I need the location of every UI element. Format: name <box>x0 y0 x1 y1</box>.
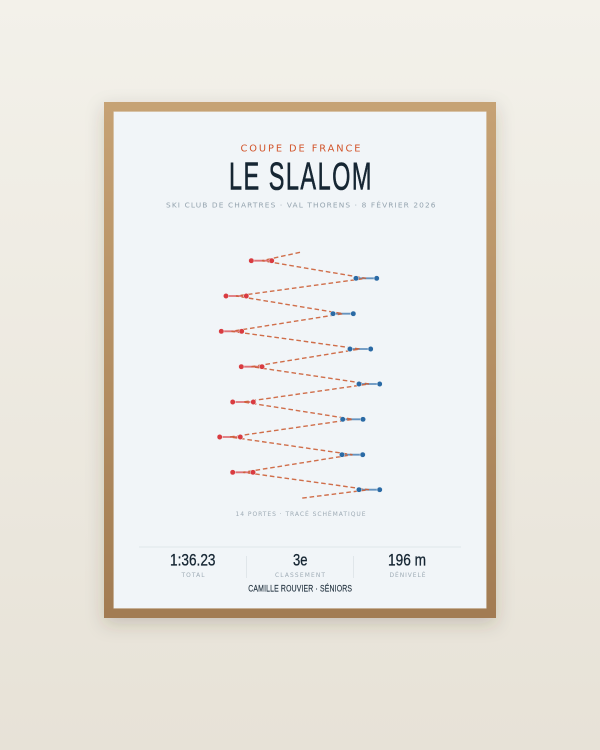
stat: total time: 1:36.23 <box>170 550 216 570</box>
blue gate dots <box>330 276 382 492</box>
stat: total time: TOTAL <box>180 573 205 579</box>
stats rule <box>139 546 461 548</box>
stat: ranking <box>275 550 325 579</box>
stat: elevation <box>388 550 426 579</box>
title: LE SLALOM <box>229 154 372 198</box>
wooden frame <box>104 102 496 618</box>
slalom course chart <box>217 252 382 498</box>
stat: elevation: DÉNIVELÉ <box>390 571 426 579</box>
eyebrow: event name: COUPE DE FRANCE <box>240 143 360 154</box>
athlete name: CAMILLE ROUVIER · SÉNIORS <box>248 582 352 594</box>
stat dividers <box>246 556 354 578</box>
red gate dots <box>217 258 274 475</box>
poster paper <box>114 112 486 608</box>
stat: ranking: CLASSEMENT <box>275 573 325 579</box>
stat: ranking: 3e <box>293 550 308 570</box>
gate poles <box>220 261 380 490</box>
dashed ski line <box>230 252 369 498</box>
stat: elevation: 196 m <box>388 550 426 570</box>
chart caption: 14 PORTES · TRACÉ SCHÉMATIQUE <box>236 510 366 518</box>
stat: total time <box>170 550 216 579</box>
subtitle: club, place and date: SKI CLUB DE CHARTRES · VAL THORENS · 8 FÉVRIER 2026 <box>166 201 436 210</box>
